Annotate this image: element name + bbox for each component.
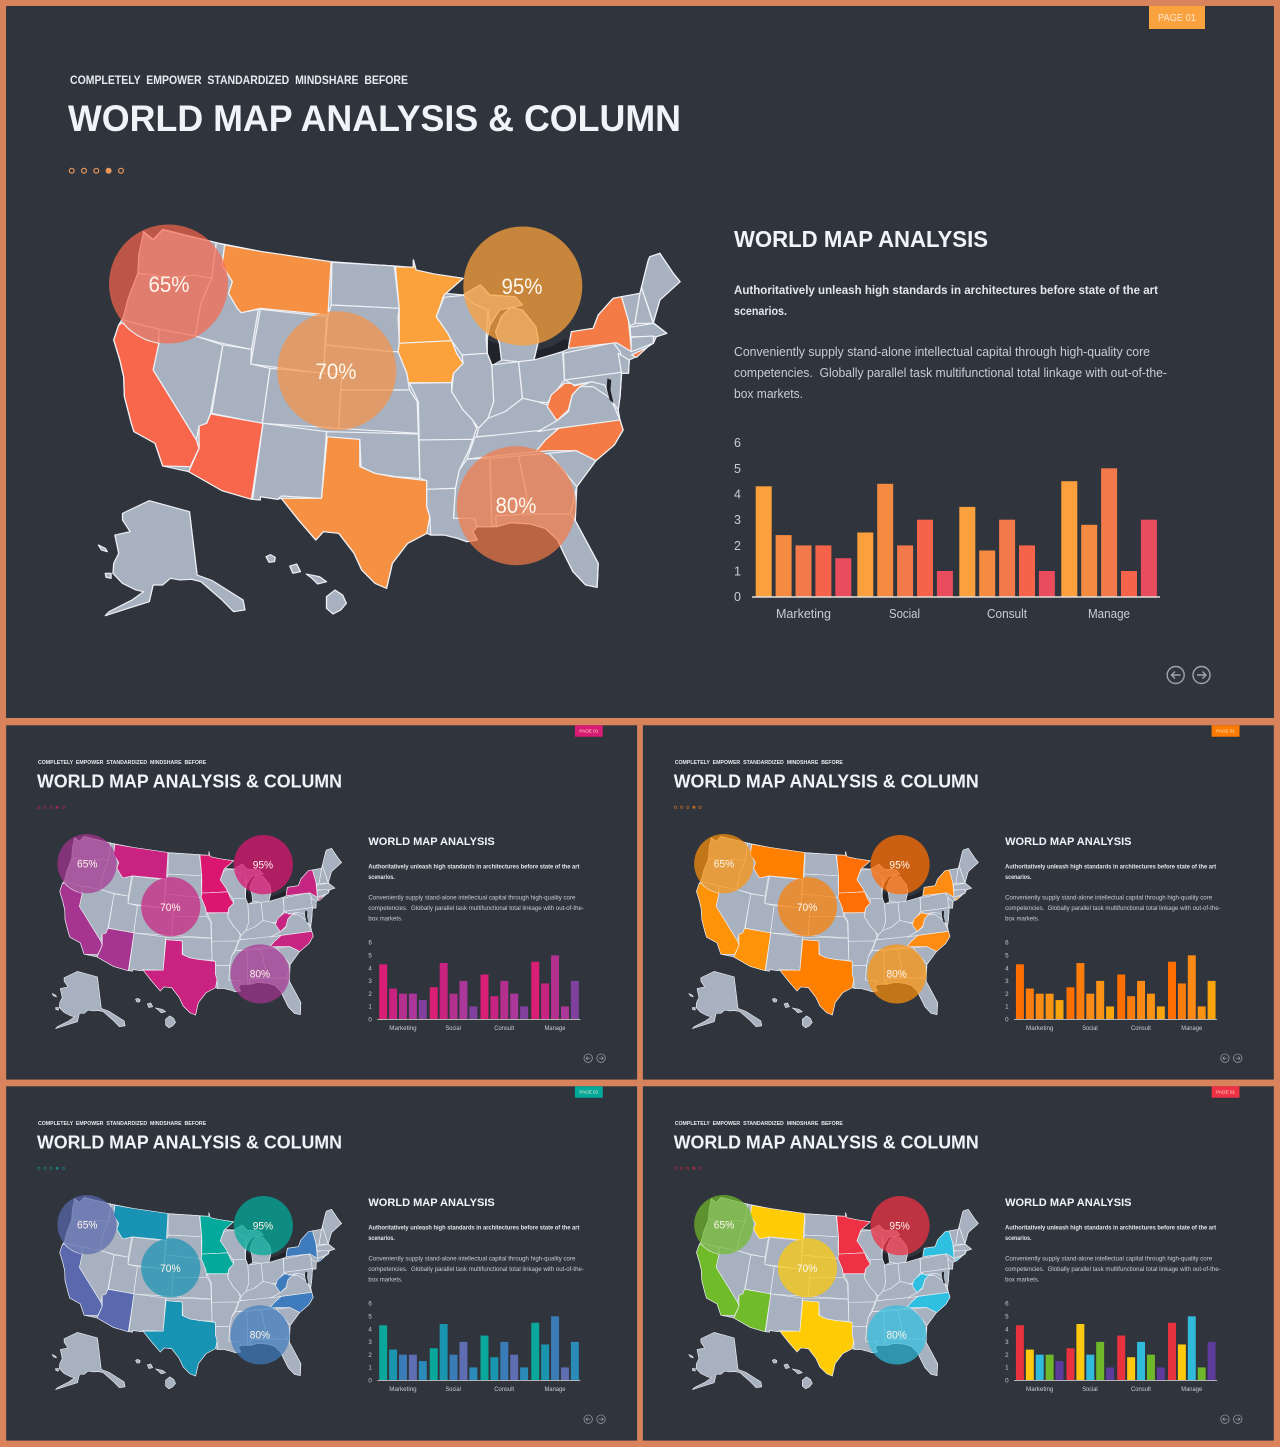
heading: world map analysis: WORLD MAP ANALYSIS bbox=[368, 1197, 495, 1209]
circle: 80% bbox=[230, 944, 290, 1004]
body paragraph: Conveniently supply stand-alone intellectual capital through high-quality core bbox=[1005, 1255, 1213, 1262]
US map with percentage circles bbox=[52, 834, 342, 1029]
subtitle: COMPLETELY EMPOWER STANDARDIZED MINDSHARE BEFORE bbox=[38, 1121, 206, 1127]
heading: world map analysis: WORLD MAP ANALYSIS bbox=[1005, 1197, 1132, 1209]
bar chart: Manage bbox=[1181, 1025, 1203, 1032]
page tag: PAGE 01 bbox=[579, 729, 598, 735]
slide: teal-blue theme bbox=[6, 1086, 637, 1441]
circle: 80% bbox=[867, 1305, 926, 1365]
bold lead paragraph: Authoritatively unleash high standards in architectures before state of the art bbox=[368, 1226, 579, 1232]
circle: 95% bbox=[870, 835, 930, 894]
circle: 80% bbox=[457, 446, 576, 565]
circle: 95%: 95% bbox=[253, 1221, 273, 1233]
bar chart: Marketing bbox=[389, 1025, 417, 1032]
navigation arrows bbox=[1167, 666, 1210, 684]
bar chart: Marketing bbox=[1026, 1386, 1054, 1393]
bar chart: Social bbox=[889, 607, 920, 621]
page tag bbox=[575, 1086, 603, 1098]
circle: 70%: 70% bbox=[160, 902, 181, 914]
slide: multicolour theme bbox=[643, 1086, 1274, 1441]
bar chart: 6 bbox=[368, 1301, 372, 1308]
circle: 65% bbox=[694, 1195, 753, 1254]
page tag: PAGE 01 bbox=[1216, 729, 1235, 735]
bar chart: 4 bbox=[368, 965, 372, 972]
bar chart: Manage bbox=[1181, 1386, 1203, 1393]
map of US states bbox=[52, 836, 342, 1029]
circle: 95% bbox=[234, 835, 293, 894]
decorative pagination dots bbox=[69, 168, 123, 174]
bar chart: 6 bbox=[1005, 1301, 1009, 1308]
bold lead paragraph bbox=[368, 865, 579, 881]
bar chart: 4 bbox=[734, 488, 741, 502]
bold lead paragraph bbox=[368, 1226, 579, 1242]
body paragraph: Conveniently supply stand-alone intellectual capital through high-quality core bbox=[368, 894, 576, 901]
subtitle: COMPLETELY EMPOWER STANDARDIZED MINDSHARE BEFORE bbox=[70, 75, 408, 87]
circle: 80%: 80% bbox=[886, 969, 907, 981]
bar chart: 5 bbox=[368, 953, 372, 960]
circle: 95% bbox=[870, 1196, 930, 1255]
decorative pagination dots bbox=[674, 1167, 701, 1170]
title: WORLD MAP ANALYSIS & COLUMN bbox=[37, 770, 342, 791]
body paragraph bbox=[1005, 1255, 1221, 1283]
circle: 65%: 65% bbox=[77, 859, 98, 871]
bold lead paragraph: Authoritatively unleash high standards in architectures before state of the art bbox=[1005, 1226, 1216, 1232]
circle: 65% bbox=[109, 224, 228, 344]
circle: 70% bbox=[277, 311, 396, 430]
circle: 70%: 70% bbox=[797, 902, 818, 914]
bar chart: 0 bbox=[368, 1016, 372, 1023]
slide: magenta theme bbox=[6, 725, 637, 1080]
bold lead paragraph: Authoritatively unleash high standards in architectures before state of the art bbox=[734, 283, 1158, 297]
map of US states bbox=[689, 1197, 978, 1390]
US map with percentage circles bbox=[98, 224, 680, 616]
page tag bbox=[575, 725, 603, 737]
bar chart: Consult bbox=[494, 1025, 514, 1032]
bar chart bbox=[368, 940, 580, 1032]
slide: large orange-red theme bbox=[6, 6, 1274, 718]
subtitle: COMPLETELY EMPOWER STANDARDIZED MINDSHARE BEFORE bbox=[38, 760, 206, 766]
circle: 80%: 80% bbox=[250, 969, 270, 981]
circle: 70% bbox=[778, 877, 837, 936]
panel background bbox=[643, 725, 1274, 1080]
circle: 95%: 95% bbox=[253, 860, 273, 872]
circle: 70% bbox=[141, 1238, 200, 1297]
heading: world map analysis: WORLD MAP ANALYSIS bbox=[734, 226, 988, 252]
panel background bbox=[643, 1086, 1274, 1441]
circle: 65%: 65% bbox=[148, 272, 190, 297]
bar chart: Social bbox=[446, 1386, 461, 1393]
circle: 80%: 80% bbox=[250, 1330, 270, 1342]
title: WORLD MAP ANALYSIS & COLUMN bbox=[674, 770, 979, 791]
body paragraph: Conveniently supply stand-alone intellectual capital through high-quality core bbox=[734, 345, 1150, 359]
decorative pagination dots bbox=[674, 806, 701, 809]
body paragraph: box markets. bbox=[368, 915, 403, 922]
bold lead paragraph: scenarios. bbox=[368, 875, 395, 881]
bar chart: 3 bbox=[734, 513, 741, 527]
bold lead paragraph bbox=[1005, 865, 1216, 881]
US map with percentage circles bbox=[689, 834, 978, 1029]
circle: 70%: 70% bbox=[797, 1263, 818, 1275]
bold lead paragraph: scenarios. bbox=[1005, 1236, 1032, 1242]
bar chart bbox=[368, 1301, 580, 1393]
body paragraph bbox=[368, 1255, 584, 1283]
bar chart: 6 bbox=[368, 940, 372, 947]
bar chart: 2 bbox=[1005, 991, 1009, 998]
circle: 80% bbox=[867, 944, 926, 1004]
bold lead paragraph: scenarios. bbox=[1005, 875, 1032, 881]
map of US states bbox=[98, 229, 680, 616]
body paragraph: competencies. Globally parallel task multifunctional total linkage with out-of-the- bbox=[734, 366, 1167, 380]
bar chart: 3 bbox=[1005, 1339, 1009, 1346]
body paragraph: competencies. Globally parallel task multifunctional total linkage with out-of-the- bbox=[1005, 905, 1221, 912]
title: WORLD MAP ANALYSIS & COLUMN bbox=[68, 97, 681, 139]
bar chart: 1 bbox=[1005, 1365, 1009, 1372]
bar chart: 3 bbox=[368, 978, 372, 985]
circle: 80%: 80% bbox=[496, 493, 536, 518]
decorative pagination dots bbox=[38, 1167, 65, 1170]
circle: 65%: 65% bbox=[714, 859, 734, 871]
body paragraph: box markets. bbox=[1005, 1276, 1040, 1283]
circle: 65% bbox=[57, 834, 117, 893]
US map with percentage circles bbox=[689, 1195, 978, 1390]
US map with percentage circles bbox=[52, 1195, 342, 1390]
bar chart: Marketing bbox=[389, 1386, 417, 1393]
circle: 95%: 95% bbox=[889, 1221, 910, 1233]
page tag: PAGE 01 bbox=[1216, 1090, 1235, 1096]
bar chart: 5 bbox=[1005, 1314, 1009, 1321]
circle: 95% bbox=[463, 226, 582, 346]
bar chart: 1 bbox=[734, 564, 741, 578]
title: WORLD MAP ANALYSIS & COLUMN bbox=[37, 1131, 342, 1152]
circle: 95%: 95% bbox=[889, 860, 910, 872]
bar chart bbox=[1005, 940, 1217, 1032]
bar chart: 6 bbox=[1005, 940, 1009, 947]
bar chart: 5 bbox=[1005, 953, 1009, 960]
bar chart: 1 bbox=[1005, 1004, 1009, 1011]
subtitle: COMPLETELY EMPOWER STANDARDIZED MINDSHARE BEFORE bbox=[675, 760, 843, 766]
navigation arrows bbox=[1221, 1054, 1242, 1062]
bold lead paragraph bbox=[1005, 1226, 1216, 1242]
bar chart: 4 bbox=[368, 1326, 372, 1333]
bar chart: Manage bbox=[545, 1025, 566, 1032]
bar chart: 0 bbox=[734, 590, 741, 604]
bar chart: 4 bbox=[1005, 1326, 1009, 1333]
bar chart: 5 bbox=[368, 1314, 372, 1321]
navigation arrows bbox=[584, 1415, 605, 1423]
circle: 70%: 70% bbox=[316, 359, 356, 384]
subtitle: COMPLETELY EMPOWER STANDARDIZED MINDSHARE BEFORE bbox=[675, 1121, 843, 1127]
bar chart: Manage bbox=[545, 1386, 566, 1393]
bold lead paragraph: scenarios. bbox=[734, 304, 787, 318]
page tag bbox=[1212, 725, 1240, 737]
bar chart: 2 bbox=[368, 1352, 372, 1359]
body paragraph: box markets. bbox=[368, 1276, 403, 1283]
panel background bbox=[6, 6, 1274, 718]
bold lead paragraph: Authoritatively unleash high standards in architectures before state of the art bbox=[1005, 865, 1216, 871]
bar chart: 1 bbox=[368, 1365, 372, 1372]
bar chart: Consult bbox=[1131, 1386, 1151, 1393]
circle: 65%: 65% bbox=[77, 1220, 98, 1232]
body paragraph bbox=[734, 345, 1167, 401]
map of US states bbox=[52, 1197, 342, 1390]
body paragraph: competencies. Globally parallel task multifunctional total linkage with out-of-the- bbox=[368, 905, 584, 912]
bar chart: 2 bbox=[734, 539, 741, 553]
slide: orange theme bbox=[643, 725, 1274, 1080]
body paragraph: competencies. Globally parallel task multifunctional total linkage with out-of-the- bbox=[1005, 1266, 1221, 1273]
bar chart: Social bbox=[1082, 1025, 1098, 1032]
body paragraph: Conveniently supply stand-alone intellectual capital through high-quality core bbox=[368, 1255, 576, 1262]
bar chart: 0 bbox=[368, 1377, 372, 1384]
bar chart: Social bbox=[446, 1025, 461, 1032]
body paragraph: box markets. bbox=[1005, 915, 1040, 922]
title: WORLD MAP ANALYSIS & COLUMN bbox=[674, 1131, 979, 1152]
circle: 65% bbox=[57, 1195, 117, 1254]
bar chart: Manage bbox=[1088, 607, 1130, 621]
circle: 65% bbox=[694, 834, 753, 893]
bar chart: 1 bbox=[368, 1004, 372, 1011]
circle: 70% bbox=[778, 1238, 837, 1297]
bold lead paragraph bbox=[734, 283, 1158, 318]
page tag: PAGE 01 bbox=[1158, 13, 1196, 24]
page tag bbox=[1149, 6, 1205, 29]
bar chart: Marketing bbox=[1026, 1025, 1054, 1032]
bar chart: Consult bbox=[494, 1386, 514, 1393]
body paragraph bbox=[1005, 894, 1221, 922]
navigation arrows bbox=[584, 1054, 605, 1062]
body paragraph: competencies. Globally parallel task multifunctional total linkage with out-of-the- bbox=[368, 1266, 584, 1273]
bar chart: Social bbox=[1082, 1386, 1098, 1393]
panel background bbox=[6, 1086, 637, 1441]
bar chart: 4 bbox=[1005, 965, 1009, 972]
circle: 65%: 65% bbox=[714, 1220, 734, 1232]
bar chart: 3 bbox=[1005, 978, 1009, 985]
bar chart: 2 bbox=[1005, 1352, 1009, 1359]
panel background bbox=[6, 725, 637, 1080]
map of US states bbox=[689, 836, 978, 1029]
page tag: PAGE 01 bbox=[579, 1090, 598, 1096]
circle: 70% bbox=[141, 877, 200, 936]
page tag bbox=[1212, 1086, 1240, 1098]
bar chart: Marketing bbox=[776, 607, 831, 621]
bar chart: 0 bbox=[1005, 1377, 1009, 1384]
navigation arrows bbox=[1221, 1415, 1242, 1423]
bar chart: Consult bbox=[1131, 1025, 1151, 1032]
bold lead paragraph: scenarios. bbox=[368, 1236, 395, 1242]
heading: world map analysis: WORLD MAP ANALYSIS bbox=[1005, 836, 1132, 848]
circle: 80% bbox=[230, 1305, 290, 1365]
body paragraph: box markets. bbox=[734, 387, 803, 401]
bar chart: 2 bbox=[368, 991, 372, 998]
bar chart bbox=[1005, 1301, 1217, 1393]
bar chart: 3 bbox=[368, 1339, 372, 1346]
bar chart bbox=[734, 436, 1160, 621]
circle: 80%: 80% bbox=[886, 1330, 907, 1342]
bar chart: 5 bbox=[734, 462, 741, 476]
body paragraph: Conveniently supply stand-alone intellectual capital through high-quality core bbox=[1005, 894, 1213, 901]
heading: world map analysis: WORLD MAP ANALYSIS bbox=[368, 836, 495, 848]
bar chart: 0 bbox=[1005, 1016, 1009, 1023]
bar chart: Consult bbox=[987, 607, 1027, 621]
decorative pagination dots bbox=[38, 806, 65, 809]
bold lead paragraph: Authoritatively unleash high standards in architectures before state of the art bbox=[368, 865, 579, 871]
circle: 95% bbox=[234, 1196, 293, 1255]
circle: 95%: 95% bbox=[502, 274, 542, 299]
bar chart: 6 bbox=[734, 436, 741, 450]
body paragraph bbox=[368, 894, 584, 922]
circle: 70%: 70% bbox=[160, 1263, 181, 1275]
